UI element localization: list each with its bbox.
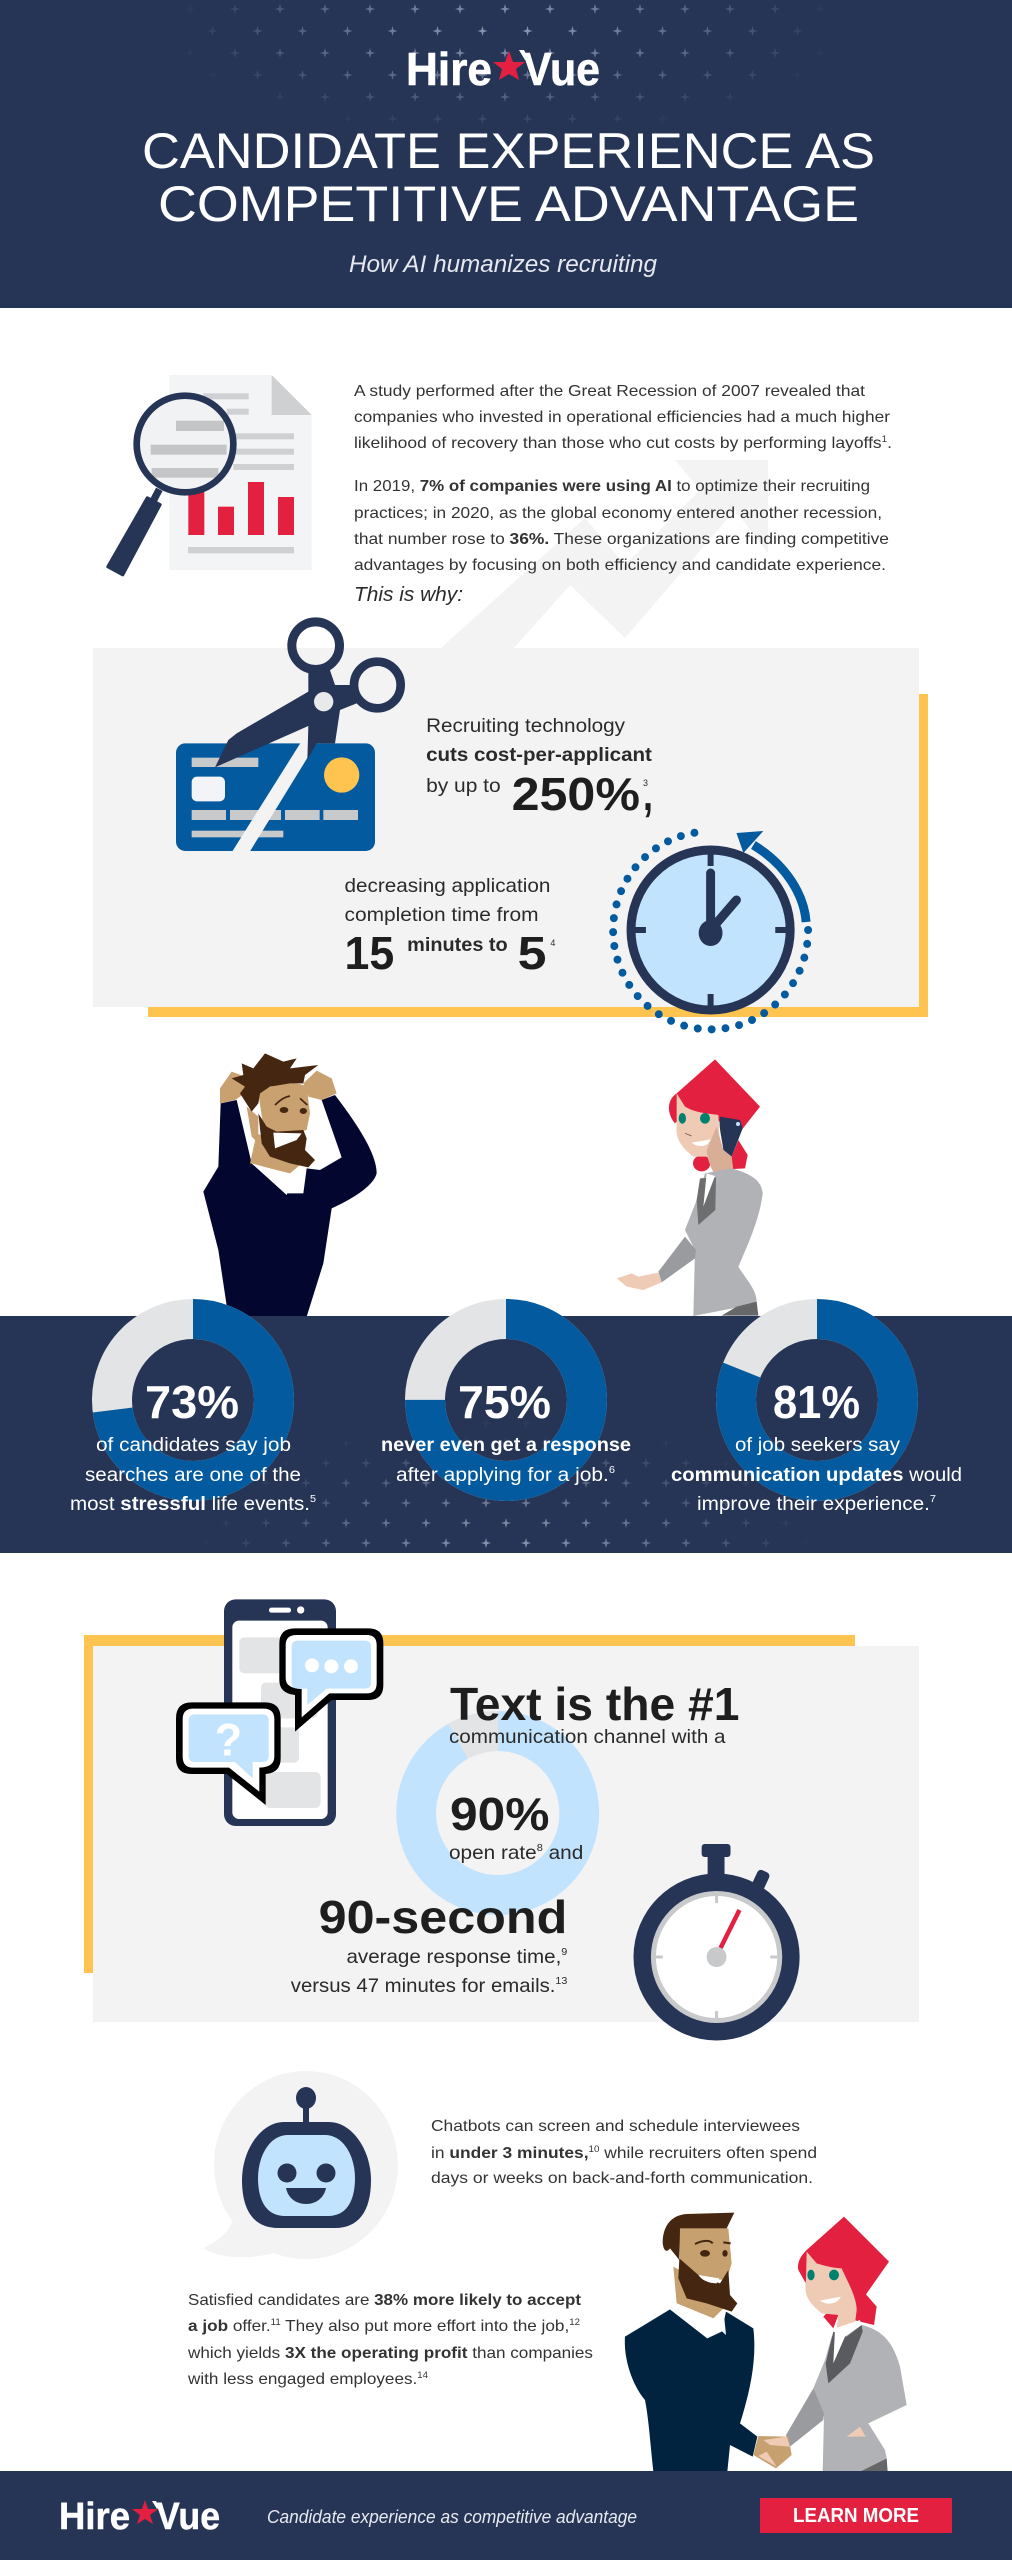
footer tagline: Candidate experience as competitive advantage xyxy=(267,2507,637,2527)
text: cost per applicant: 3 xyxy=(643,778,648,788)
text block: satisfied candidates xyxy=(187,2292,593,2388)
text: text is the #1 xyxy=(449,1678,739,1864)
panel: statistics band xyxy=(0,1316,1012,1553)
text: this is why: This is why: xyxy=(354,584,463,606)
title xyxy=(142,123,875,232)
button: learn more xyxy=(760,2498,952,2533)
logo: HireVue: Hire xyxy=(406,43,492,95)
donut: 81% xyxy=(671,1319,962,1515)
illustration: handshake between man and woman xyxy=(625,2213,907,2472)
text: cost per applicant xyxy=(426,716,653,820)
text: 90-second response: versus 47 minutes for emails. xyxy=(291,1976,536,1997)
text: cost per applicant: by up to xyxy=(426,776,501,797)
icon: stopwatch xyxy=(634,1844,800,2040)
donut: 75% xyxy=(381,1319,631,1486)
text block: satisfied candidates: Satisfied candidates are 38% more likely to accept xyxy=(188,2292,582,2309)
donut: 75%: 6 xyxy=(609,1465,615,1476)
text block: chatbots: Chatbots can screen and schedule interviewees xyxy=(431,2118,800,2135)
header banner xyxy=(0,0,1012,308)
text block: intro: . xyxy=(887,435,892,452)
text: cost per applicant: , xyxy=(643,768,653,820)
panel: cost and time savings xyxy=(93,622,928,1029)
panel: text messaging xyxy=(84,1599,919,2040)
donut: 81%: communication updates would xyxy=(671,1465,962,1486)
text block: chatbots: 10 xyxy=(589,2144,599,2154)
text: cost per applicant: 250% xyxy=(512,768,640,820)
donut: 73%: 73% xyxy=(145,1376,239,1428)
donut: 81%: 7 xyxy=(930,1494,936,1505)
text block: intro: A study performed after the Great Recession of 2007 revealed that xyxy=(354,383,866,400)
text block: intro: advantages by focusing on both efficiency and candidate experience. xyxy=(354,557,886,574)
text: completion time xyxy=(345,876,555,979)
icon: chatbot in speech bubble xyxy=(203,2071,398,2259)
footer logo: Hire xyxy=(59,2496,130,2538)
donut: 81%: improve their experience. xyxy=(697,1494,910,1515)
text block: intro: practices; in 2020, as the global economy entered another recession, xyxy=(354,505,882,522)
text block: chatbots xyxy=(431,2118,817,2187)
text: text is the #1: 90% xyxy=(450,1788,549,1840)
text: completion time: 4 xyxy=(550,938,555,948)
icon: credit card cut by scissors xyxy=(176,622,401,851)
text: text is the #1: communication channel with a xyxy=(449,1727,726,1748)
text: 90-second response: average response time, xyxy=(347,1947,544,1968)
text: completion time: decreasing application xyxy=(345,876,550,897)
text block: intro: companies who invested in operational efficiencies had a much higher xyxy=(354,409,891,426)
text block: satisfied candidates: which yields 3X the operating profit than companies xyxy=(187,2345,593,2362)
text block: intro: that number rose to 36%. These organizations are finding competitive xyxy=(354,531,889,548)
text block: satisfied candidates: 12 xyxy=(569,2317,580,2327)
text: text is the #1: Text is the #1 xyxy=(450,1678,739,1730)
text: completion time: 5 xyxy=(518,927,546,979)
text block: chatbots: days or weeks on back-and-forth communication. xyxy=(431,2170,813,2187)
subtitle: How AI humanizes recruiting xyxy=(349,251,658,278)
button: learn more: LEARN MORE xyxy=(793,2505,919,2527)
donut: 75%: after applying for a job. xyxy=(396,1465,589,1486)
text block: satisfied candidates: They also put more effort into the job, xyxy=(281,2318,569,2335)
title: CANDIDATE EXPERIENCE AS xyxy=(142,123,875,179)
donut: 73%: most stressful life events. xyxy=(70,1494,302,1515)
footer banner xyxy=(0,2471,1012,2560)
text block: satisfied candidates: a job offer. xyxy=(188,2318,268,2335)
footer logo xyxy=(59,2496,220,2538)
donut: 75%: never even get a response xyxy=(381,1435,631,1456)
text block: satisfied candidates: 11 xyxy=(271,2317,281,2327)
text: completion time: 15 xyxy=(345,927,394,979)
text block: intro: 1 xyxy=(882,434,887,444)
logo: HireVue: Vue xyxy=(523,43,600,95)
text block: intro: likelihood of recovery than those who cut costs by performing layoffs xyxy=(354,435,838,452)
text block: chatbots: in under 3 minutes, xyxy=(431,2145,577,2162)
donut: 90% open rate xyxy=(387,1702,609,1924)
text: text is the #1: 8 xyxy=(537,1843,543,1854)
text block: intro: In 2019, 7% of companies were using AI to optimize their recruiting xyxy=(354,478,870,495)
text block: intro xyxy=(354,383,892,574)
text: text is the #1: open rate xyxy=(449,1843,529,1864)
text block: chatbots: while recruiters often spend xyxy=(599,2145,817,2162)
text: cost per applicant: cuts cost-per-applicant xyxy=(426,745,653,766)
donut: 73%: of candidates say job xyxy=(96,1435,291,1456)
donut: 73% xyxy=(70,1319,316,1515)
text: completion time: minutes to xyxy=(407,935,508,956)
icon: document with magnifying glass xyxy=(108,375,312,575)
text: cost per applicant: Recruiting technology xyxy=(426,716,626,737)
donut: 81%: 81% xyxy=(773,1376,860,1428)
text: 90-second response xyxy=(291,1891,568,1997)
text block: satisfied candidates: with less engaged employees. xyxy=(188,2371,402,2388)
text: 90-second response: 9 xyxy=(561,1947,568,1958)
text: text is the #1: and xyxy=(543,1843,583,1864)
text block: satisfied candidates: 14 xyxy=(417,2370,428,2380)
logo: HireVue xyxy=(406,43,600,95)
icon: phone with chat bubbles xyxy=(176,1599,383,1826)
text: completion time: completion time from xyxy=(345,905,538,926)
title: COMPETITIVE ADVANTAGE xyxy=(158,176,859,232)
text: 90-second response: 90-second xyxy=(319,1891,567,1943)
donut: 75%: 75% xyxy=(458,1376,551,1428)
footer logo: Vue xyxy=(156,2496,220,2538)
donut: 73%: searches are one of the xyxy=(85,1465,301,1486)
icon: phone with chat bubbles: ? xyxy=(215,1715,242,1766)
donut: 73%: 5 xyxy=(310,1494,316,1505)
text: 90-second response: 13 xyxy=(555,1976,568,1987)
illustration: stressed man xyxy=(203,1053,377,1317)
illustration: woman on the phone xyxy=(617,1059,763,1316)
background arrow xyxy=(441,460,768,648)
donut: 81%: of job seekers say xyxy=(735,1435,901,1456)
icon: clock xyxy=(613,831,808,1029)
